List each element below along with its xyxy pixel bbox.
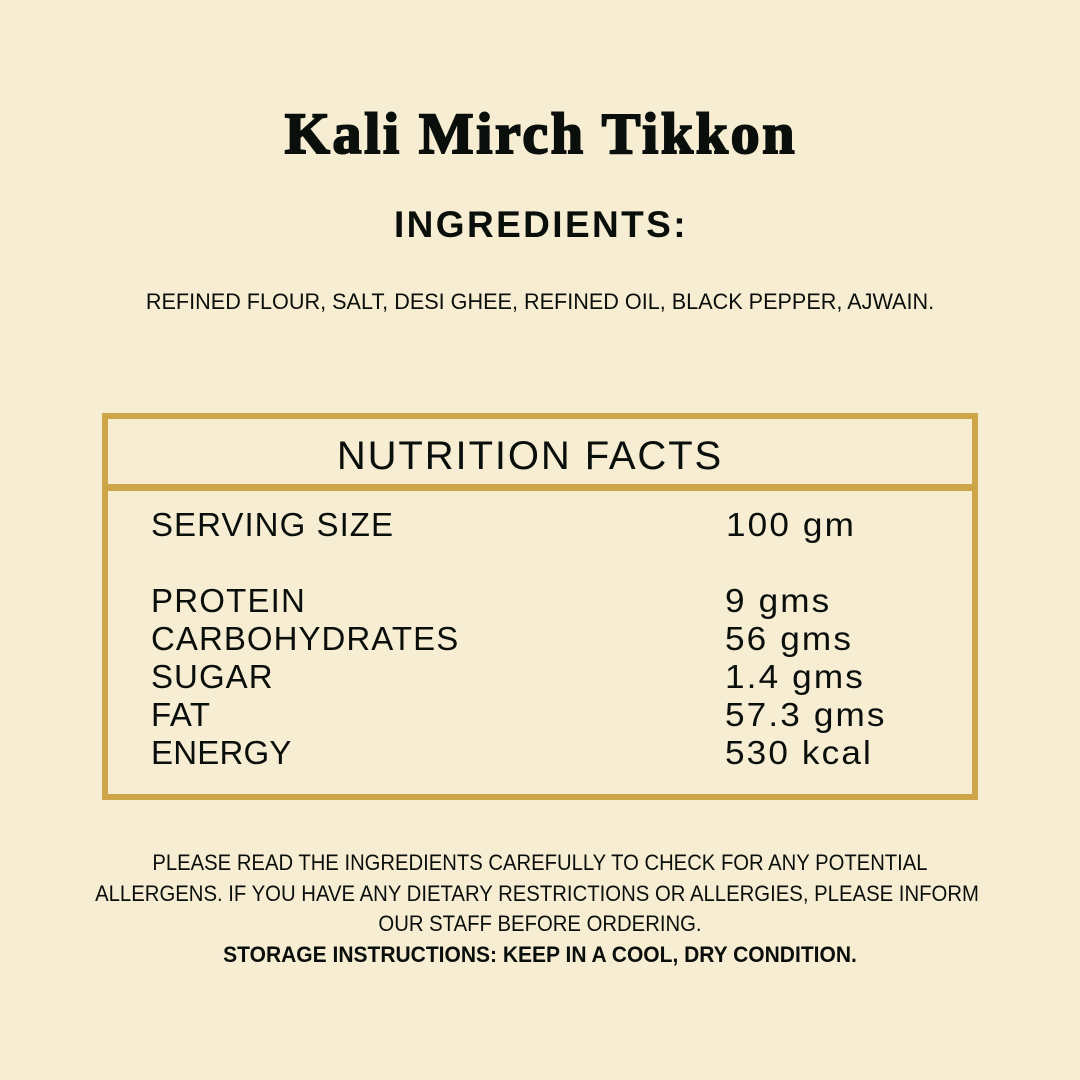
nutrient labels: CARBOHYDRATES [151, 620, 459, 657]
ingredients heading: INGREDIENTS: [394, 204, 688, 245]
nutrition heading: NUTRITION FACTS [337, 434, 723, 478]
nutrient labels: PROTEIN [151, 582, 306, 619]
allergen notice: STORAGE INSTRUCTIONS: KEEP IN A COOL, DRY CONDITION. [223, 942, 857, 966]
heading divider [108, 484, 972, 491]
nutrient labels [151, 582, 459, 771]
allergen notice: ALLERGENS. IF YOU HAVE ANY DIETARY RESTRICTIONS OR ALLERGIES, PLEASE INFORM [95, 880, 979, 906]
nutrient values: 1.4 gms [725, 658, 865, 695]
nutrient labels: SUGAR [151, 658, 274, 695]
nutrient labels: ENERGY [151, 734, 292, 771]
panel: nutrition facts [102, 413, 978, 800]
allergen notice: PLEASE READ THE INGREDIENTS CAREFULLY TO CHECK FOR ANY POTENTIAL [152, 850, 928, 875]
nutrient values: 57.3 gms [725, 696, 887, 733]
nutrient labels: FAT [151, 696, 211, 733]
title: Kali Mirch Tikkon [285, 101, 797, 166]
serving size value: 100 gm [726, 506, 856, 543]
nutrient values: 9 gms [725, 582, 831, 619]
allergen notice [95, 850, 979, 966]
serving size label: SERVING SIZE [151, 506, 394, 543]
nutrient values: 530 kcal [725, 734, 873, 771]
ingredients list: REFINED FLOUR, SALT, DESI GHEE, REFINED OIL, BLACK PEPPER, AJWAIN. [146, 289, 934, 314]
allergen notice: OUR STAFF BEFORE ORDERING. [378, 911, 702, 936]
nutrient values [725, 582, 887, 771]
nutrient values: 56 gms [725, 620, 853, 657]
